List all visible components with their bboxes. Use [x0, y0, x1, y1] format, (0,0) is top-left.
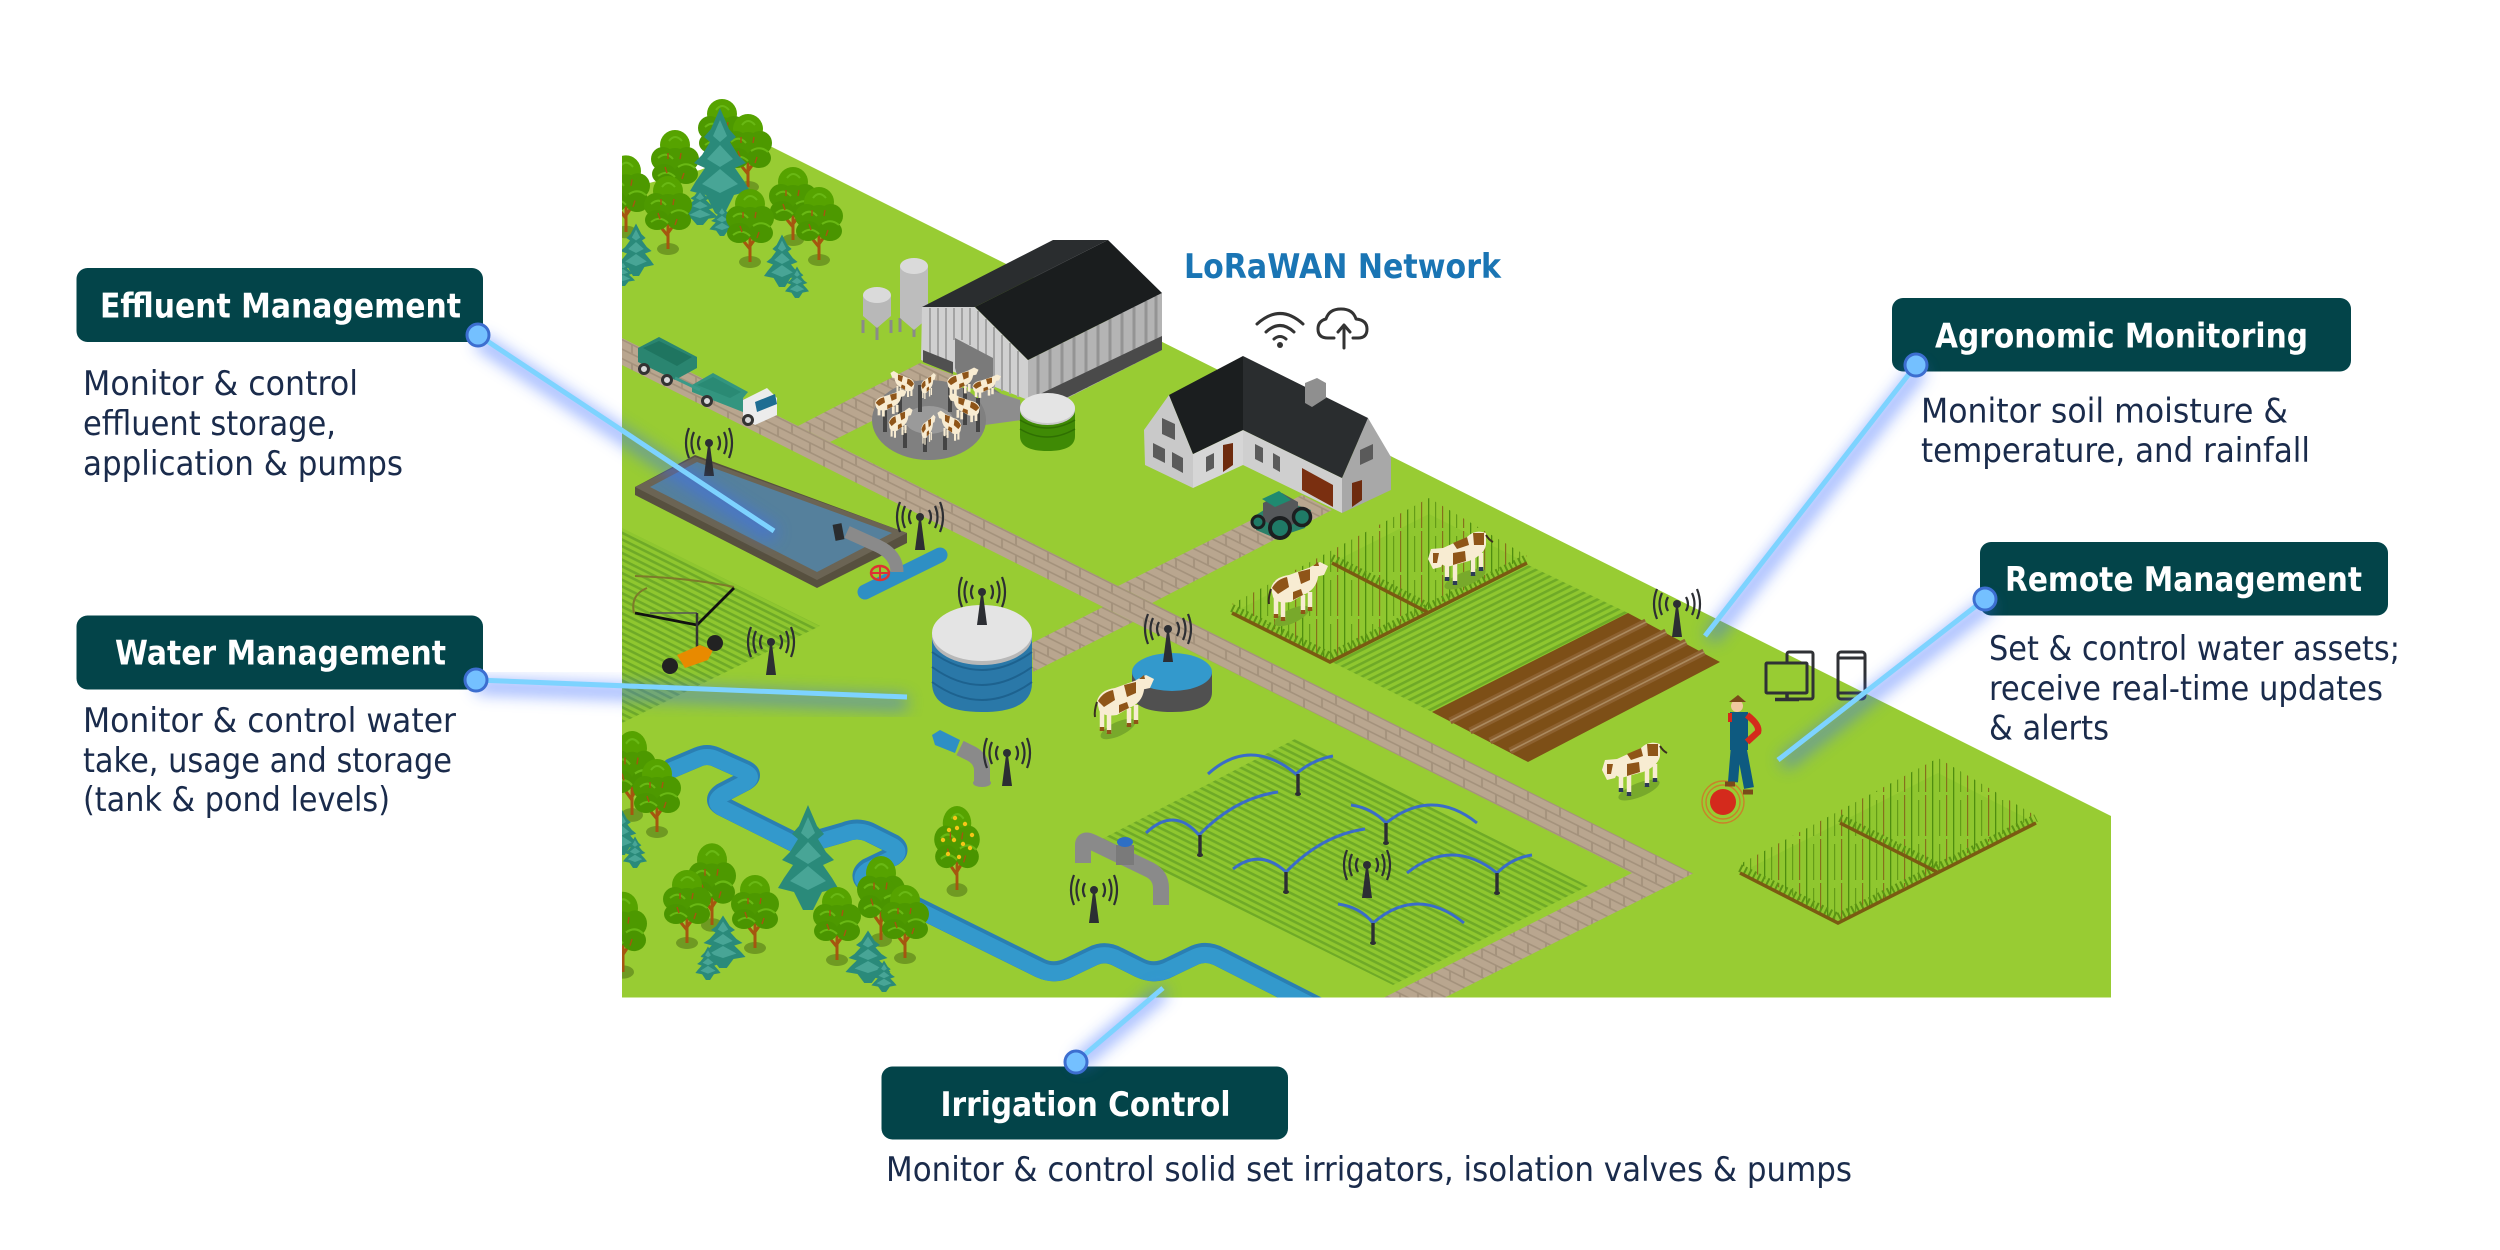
- farmhouse: [1144, 356, 1391, 513]
- text: remote description: [1989, 629, 2400, 748]
- crop field lower right: [1740, 758, 2036, 923]
- barn: [921, 240, 1162, 418]
- field: centre pivot striped paddock: [622, 528, 820, 723]
- tractor: [1252, 491, 1311, 538]
- text: effluent description: effluent storage,: [83, 404, 336, 443]
- tree: pear tree with fruit: [934, 806, 980, 897]
- sprinklers: [1146, 755, 1532, 945]
- text: agronomic description: Monitor soil moisture &: [1921, 392, 2288, 430]
- label: Water Management: [76, 616, 483, 690]
- ploughed field: [1432, 613, 1720, 762]
- text: agronomic description: temperature, and rainfall: [1921, 431, 2310, 470]
- label: Remote Management: Remote Management: [2005, 560, 2362, 599]
- effluent pipe and pump with valve: [837, 524, 940, 592]
- effluent pond: [635, 455, 907, 588]
- field: solid set irrigation paddock: [1100, 739, 1588, 985]
- label: Remote Management: [1980, 542, 2388, 616]
- callout line: irrigation: [1065, 988, 1164, 1073]
- icon: computer and tablet: [1766, 652, 1813, 700]
- antennas: LoRaWAN gateways and sensors: [686, 428, 1700, 923]
- text: remote description: & alerts: [1989, 708, 2109, 748]
- heading: LoRaWAN Network: LoRaWAN Network: [1184, 247, 1502, 286]
- water take pump: [932, 730, 991, 787]
- text: effluent description: [83, 364, 403, 483]
- text: remote description: Set & control water assets;: [1989, 629, 2400, 668]
- text: water description: Monitor & control water: [83, 701, 456, 740]
- label: Irrigation Control: [882, 1066, 1288, 1140]
- centre pivot irrigator: [633, 576, 734, 674]
- trees: lower-left forest: [599, 731, 929, 992]
- label: Effluent Management: [76, 268, 483, 342]
- trees: top-left forest: [602, 99, 843, 298]
- label: Agronomic Monitoring: Agronomic Monitoring: [1935, 316, 2308, 356]
- text: water description: (tank & pond levels): [83, 780, 390, 819]
- road: stone farm tracks: [622, 338, 1693, 998]
- icon: wifi: [1257, 314, 1303, 348]
- rotary milking platform with cows: [872, 368, 1022, 460]
- icon: cloud upload: [1318, 309, 1367, 348]
- text: water description: [83, 701, 456, 819]
- text: remote description: receive real-time updates: [1989, 669, 2383, 708]
- text: agronomic description: [1921, 392, 2310, 470]
- water pond: [1132, 653, 1212, 712]
- label: Agronomic Monitoring: [1892, 298, 2351, 372]
- river: [672, 755, 1330, 1015]
- silos: [863, 258, 928, 340]
- water tank: [932, 605, 1032, 712]
- farmer with red target marker: [1702, 695, 1758, 823]
- text: irrigation description: Monitor & control solid set irrigators, isolation valves & pumps: [886, 1150, 1852, 1189]
- label: Irrigation Control: Irrigation Control: [940, 1085, 1230, 1124]
- label: Effluent Management: Effluent Management: [100, 286, 461, 326]
- callout line: agronomic: [1705, 354, 1927, 639]
- label: Water Management: Water Management: [115, 634, 446, 672]
- green storage tank: [1020, 393, 1075, 451]
- truck and trailers: [638, 337, 777, 425]
- callout line: effluent: [467, 324, 774, 536]
- map: farm ground: [622, 145, 2111, 998]
- text: effluent description: Monitor & control: [83, 364, 358, 403]
- field: striped paddock beside crops: [1332, 565, 1628, 712]
- text: water description: take, usage and storage: [83, 741, 452, 780]
- text: effluent description: application & pumps: [83, 444, 403, 483]
- callout line: remote: [1778, 588, 1996, 764]
- crop field with two paddocks: [1232, 498, 1527, 662]
- callout line: water: [465, 669, 907, 703]
- irrigation main valve: [1083, 837, 1161, 905]
- cows grazing: [1095, 532, 1667, 805]
- icon: phone: [1838, 652, 1865, 699]
